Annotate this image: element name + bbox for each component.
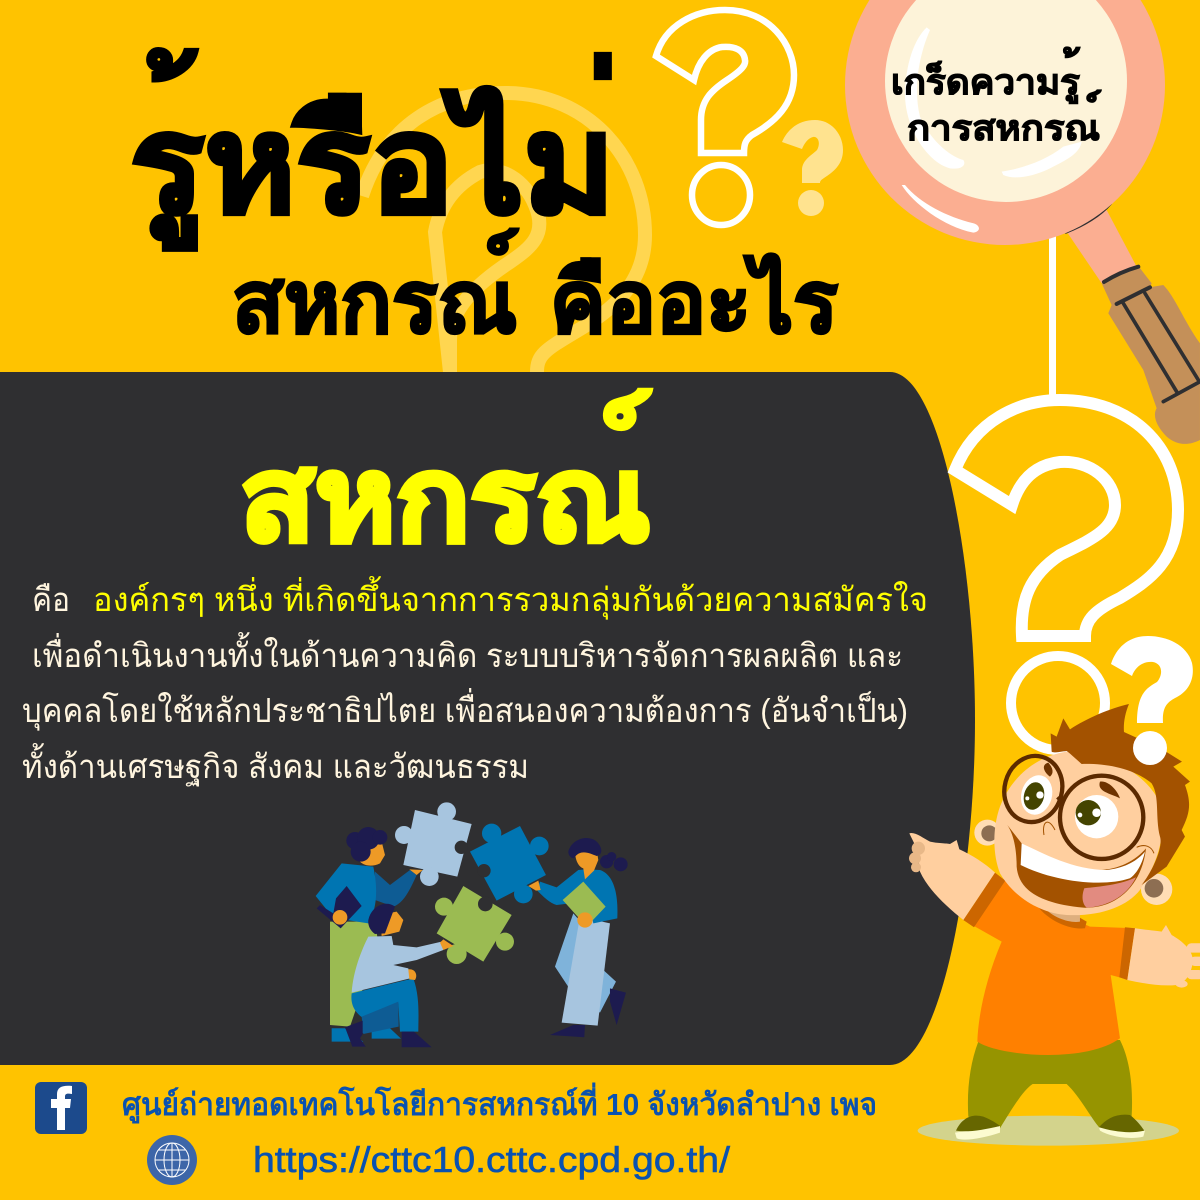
icon: big white outlined question mark <box>955 400 1178 750</box>
footer url: https://cttc10.cttc.cpd.go.th/ <box>253 1139 730 1180</box>
title line 2: คืออะไร <box>550 253 838 351</box>
magnifier label: ้ <box>1063 46 1081 58</box>
icon: small cream question mark <box>782 120 843 216</box>
icon: white outlined question mark top <box>656 10 794 225</box>
icon: facebook <box>35 1082 87 1134</box>
title line 2 <box>232 228 838 351</box>
title line 1: ้ <box>147 48 198 81</box>
white connector line <box>1049 235 1056 400</box>
magnifier label <box>891 46 1102 148</box>
puzzle piece dark blue <box>470 824 549 903</box>
icon: magnifying glass <box>845 0 1200 444</box>
definition text <box>22 576 928 787</box>
person standing right <box>528 838 628 1037</box>
panel heading: ์ <box>603 388 653 431</box>
title line 2: ์ <box>487 228 519 256</box>
title line 2: สหกรณ <box>232 255 517 351</box>
illustration: team with puzzle pieces <box>316 802 628 1047</box>
icon: globe <box>147 1135 197 1185</box>
definition text: คือ <box>32 581 70 618</box>
panel heading: สหกรณ <box>240 434 650 566</box>
definition text: เพื่อดำเนินงานทั้งในด้านความคิด ระบบบริหารจัดการผลผลิต และ <box>32 632 903 674</box>
title line 1: รูหรือไม <box>130 87 615 250</box>
icon: pale question mark behind title <box>362 93 645 372</box>
magnifier label: เกร็ดความรู <box>891 60 1080 104</box>
definition text: ทั้งด้านเศรษฐกิจ สังคม และวัฒนธรรม <box>22 743 529 787</box>
character: boy with glasses <box>909 704 1200 1146</box>
puzzle piece green <box>435 886 514 964</box>
magnifier label: การสหกรณ <box>907 109 1100 148</box>
puzzle piece light blue <box>395 802 472 886</box>
person standing left <box>316 827 423 1042</box>
dark panel <box>0 372 975 1065</box>
person crouching <box>345 904 453 1047</box>
footer organisation text: ศูนย์ถ่ายทอดเทคโนโลยีการสหกรณ์ที่ 10 จังหวัดลำปาง เพจ <box>122 1082 877 1124</box>
icon: white solid question mark <box>1111 636 1193 765</box>
title line 1: ่ <box>595 53 611 79</box>
definition text: องค์กรๆ หนึ่ง ที่เกิดขึ้นจากการรวมกลุ่มกันด้วยความสมัครใจ <box>93 576 928 620</box>
definition text: บุคคลโดยใช้หลักประชาธิปไตย เพื่อสนองความต้องการ (อันจำเป็น) <box>22 688 908 731</box>
magnifier label: ์ <box>1086 89 1102 103</box>
